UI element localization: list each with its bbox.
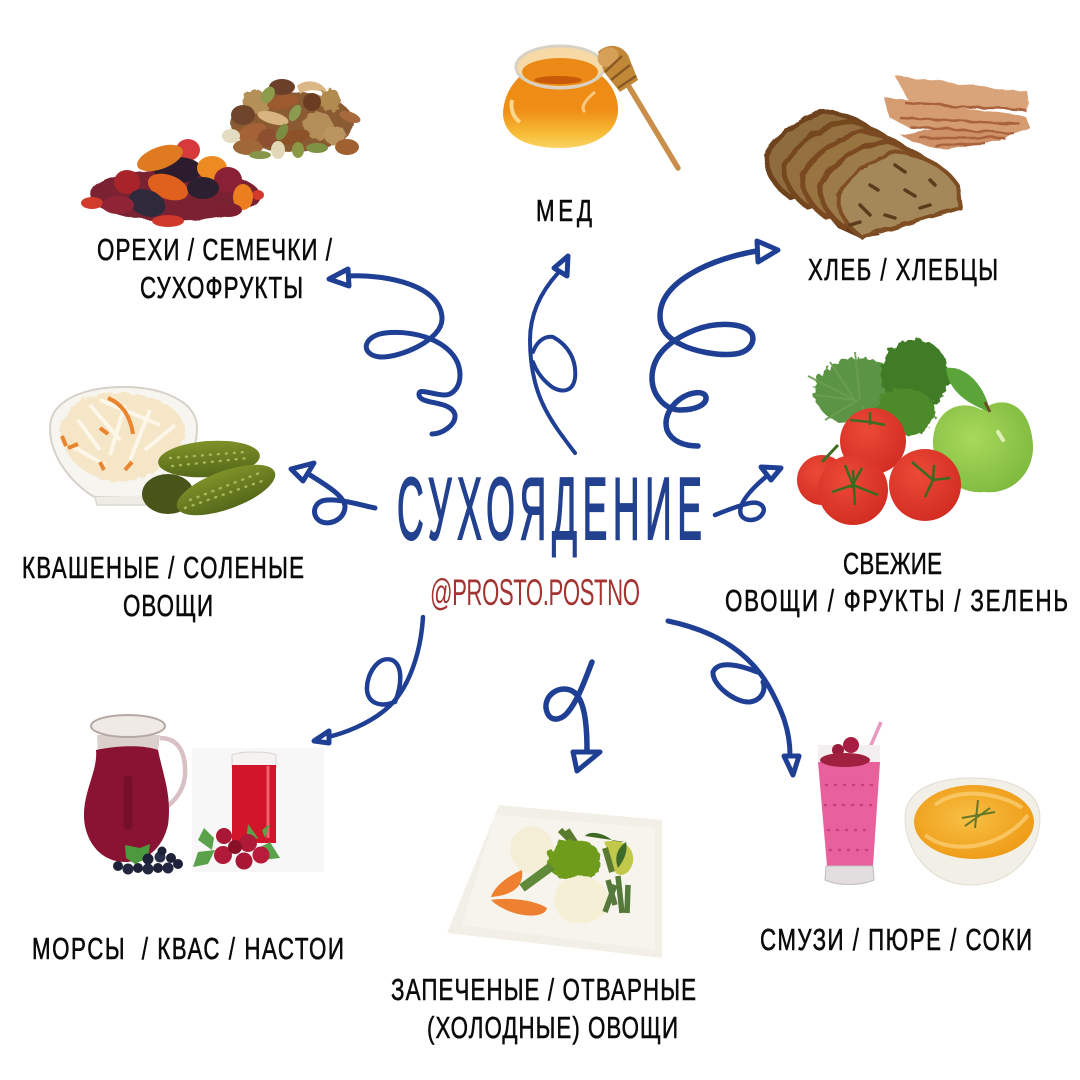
image: nuts <box>222 79 362 159</box>
label: baked and boiled vegetables: ЗАПЕЧЕНЫЕ / ОТВАРНЫЕ <box>391 972 696 1007</box>
arrow: to drinks <box>314 617 423 743</box>
image: soup bowl <box>905 778 1040 885</box>
image: crispbread stack <box>884 76 1030 150</box>
label: nuts and dried fruits <box>97 232 332 305</box>
arrow: to honey <box>530 256 575 453</box>
label: honey: МЕД <box>536 193 592 228</box>
image: plate of cooked vegetables <box>447 805 662 958</box>
label: baked and boiled vegetables <box>391 972 696 1045</box>
image: sauerkraut bowl <box>50 387 197 505</box>
image: dried fruits <box>81 139 264 227</box>
label: fermented and pickled vegetables: ОВОЩИ <box>123 588 213 623</box>
label: fresh vegetables, fruit, herbs: ОВОЩИ / ФРУКТЫ / ЗЕЛЕНЬ <box>725 583 1068 618</box>
image: honey jar with dipper <box>503 43 678 168</box>
image: green apple <box>933 368 1033 492</box>
title: СУХОЯДЕНИЕ <box>397 461 702 559</box>
image: sliced bread <box>766 112 960 238</box>
arrow: to fresh produce <box>715 467 781 520</box>
image: berry juice jug <box>84 715 185 862</box>
image: cranberries with leaves <box>193 824 280 870</box>
arrow: to cooked vegetables <box>546 662 600 771</box>
label: nuts and dried fruits: ОРЕХИ / СЕМЕЧКИ / <box>97 232 332 267</box>
label: drinks: МОРСЫ / КВАС / НАСТОИ <box>32 931 344 966</box>
image: pickles <box>142 437 281 526</box>
arrow: to smoothies <box>668 621 799 775</box>
label: fresh vegetables, fruit, herbs: СВЕЖИЕ <box>843 546 942 581</box>
label: baked and boiled vegetables: (ХОЛОДНЫЕ) ОВОЩИ <box>427 1010 678 1045</box>
label: smoothies, purees, juices: СМУЗИ / ПЮРЕ / СОКИ <box>760 922 1032 957</box>
subtitle: handle: @PROSTO.POSTNO <box>430 572 640 613</box>
image: greens <box>808 339 949 436</box>
image: tomatoes <box>797 408 961 525</box>
image: smoothie glass <box>818 722 881 884</box>
label: fermented and pickled vegetables: КВАШЕНЫЕ / СОЛЕНЫЕ <box>22 550 304 585</box>
label: fresh vegetables, fruit, herbs <box>725 546 1068 618</box>
arrow: to bread <box>652 241 778 446</box>
arrow: to nuts <box>329 269 460 434</box>
label: bread: ХЛЕБ / ХЛЕБЦЫ <box>808 252 998 287</box>
image: blackcurrants with mint <box>113 844 183 874</box>
label: nuts and dried fruits: СУХОФРУКТЫ <box>140 270 303 305</box>
arrow: to pickles <box>291 463 375 523</box>
label: fermented and pickled vegetables <box>22 550 304 623</box>
image: grey panel with glass of juice <box>192 748 324 872</box>
